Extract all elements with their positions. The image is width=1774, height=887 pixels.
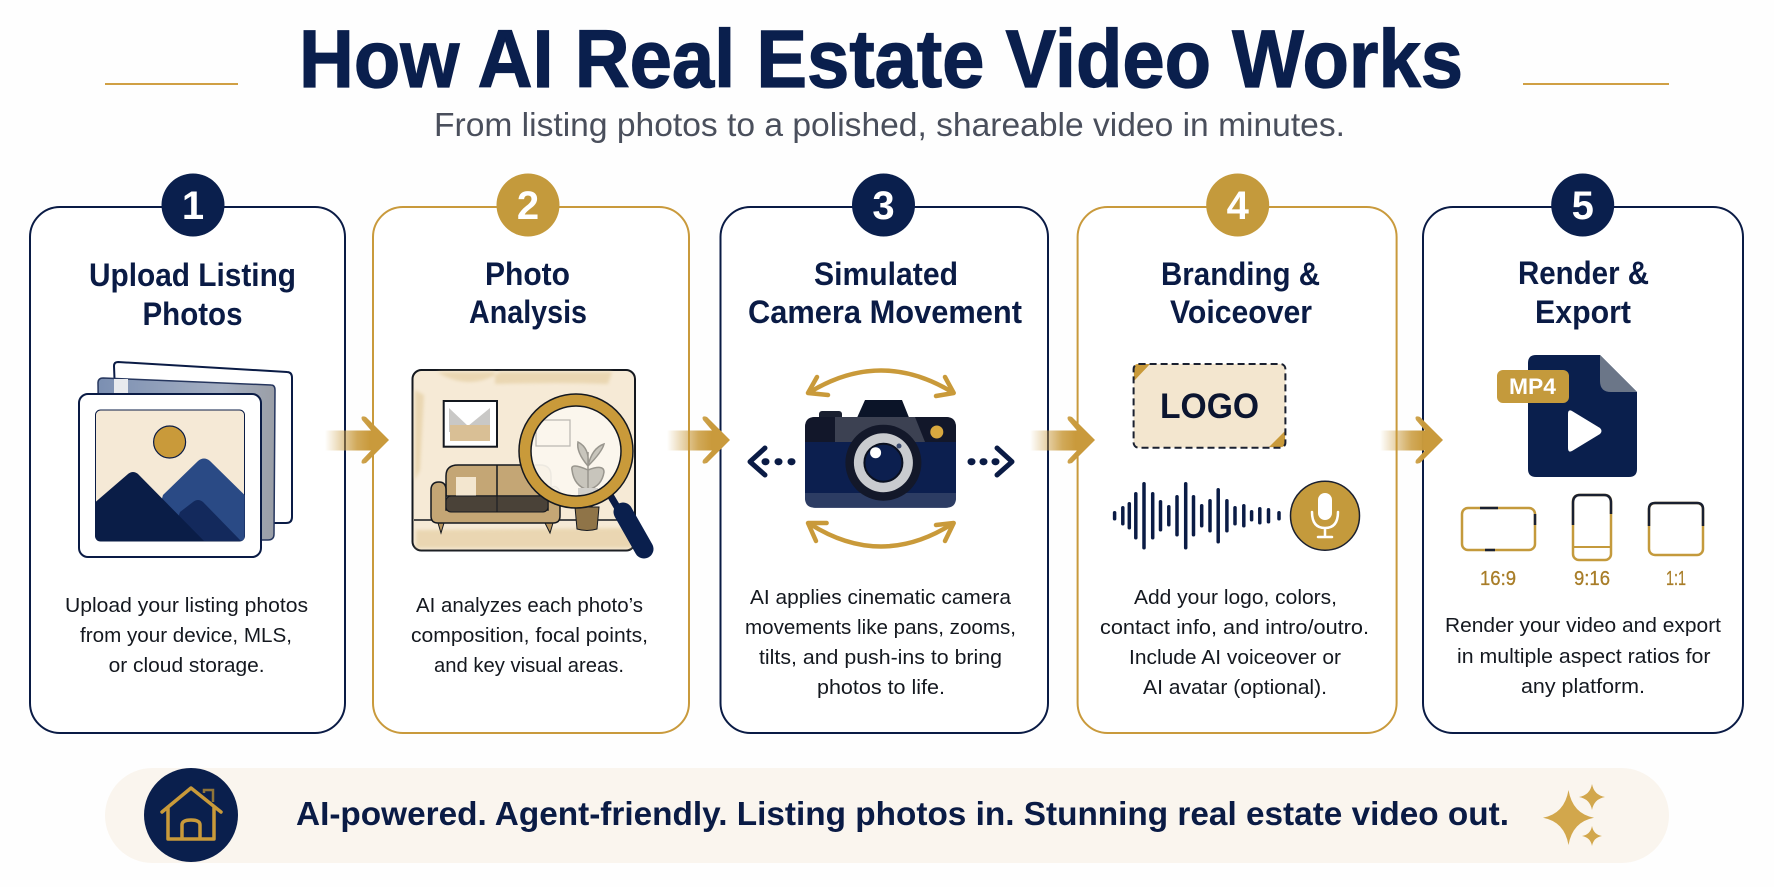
arrow: step 4 to 5 <box>1380 416 1443 464</box>
description <box>1445 614 1721 698</box>
heading: Branding & <box>1161 256 1320 292</box>
heading: Photos <box>142 296 242 332</box>
description <box>1100 586 1369 699</box>
description: AI avatar (optional). <box>1143 676 1327 699</box>
arrow: step 2 to 3 <box>667 416 730 464</box>
heading: Analysis <box>469 294 587 330</box>
card frame <box>373 207 689 733</box>
icon: room photo with magnifier <box>412 370 644 550</box>
tagline: AI-powered. Agent-friendly. Listing photos in. Stunning real estate video out. <box>296 795 1509 832</box>
description: or cloud storage. <box>109 654 265 677</box>
icon: mp4 file <box>1497 355 1637 477</box>
description: movements like pans, zooms, <box>745 616 1016 639</box>
title: How AI Real Estate Video Works <box>299 14 1463 105</box>
heading: Photo <box>485 256 570 292</box>
subtitle: From listing photos to a polished, shareable video in minutes. <box>434 106 1345 143</box>
icon: 16:9 ratio <box>1462 508 1535 590</box>
icon: logo placeholder: LOGO <box>1160 387 1259 426</box>
banner <box>105 768 1669 863</box>
step badge 4 <box>1206 174 1269 236</box>
step badge 2: 2 <box>517 184 539 228</box>
card frame <box>1423 207 1743 733</box>
step badge 5 <box>1551 174 1614 236</box>
heading <box>748 256 1022 330</box>
heading <box>1518 255 1649 330</box>
description: Include AI voiceover or <box>1129 646 1341 669</box>
icon: house <box>144 768 238 862</box>
heading: Camera Movement <box>748 294 1022 330</box>
step badge 1 <box>162 174 224 236</box>
icon: logo placeholder <box>1134 364 1285 448</box>
description: any platform. <box>1521 675 1645 698</box>
step badge 3: 3 <box>872 184 895 228</box>
icon: microphone <box>1290 481 1360 550</box>
icon: mp4 file: MP4 <box>1509 374 1557 399</box>
icon: camera <box>805 400 956 508</box>
icon: 16:9 ratio: 16:9 <box>1480 568 1516 590</box>
description: composition, focal points, <box>411 624 648 647</box>
panel: step 4 branding <box>1078 174 1397 733</box>
heading <box>1161 256 1320 330</box>
heading: Render & <box>1518 255 1649 291</box>
panel: step 1 upload <box>30 174 345 733</box>
description: Upload your listing photos <box>65 594 308 617</box>
description: AI applies cinematic camera <box>750 586 1012 609</box>
step badge 4: 4 <box>1227 184 1250 228</box>
heading: Upload Listing <box>89 257 296 293</box>
icon: sparkles <box>1543 784 1605 846</box>
description: AI analyzes each photo’s <box>416 594 643 617</box>
description: from your device, MLS, <box>80 624 292 647</box>
description <box>411 594 648 677</box>
step badge 3 <box>852 174 915 236</box>
step badge 5: 5 <box>1572 184 1594 228</box>
icon: 9:16 ratio: 9:16 <box>1574 568 1610 590</box>
icon: photo stack <box>79 362 292 557</box>
description: contact info, and intro/outro. <box>1100 616 1369 639</box>
banner background <box>105 768 1669 863</box>
icon: pan arrows <box>750 448 1012 475</box>
icon: 1:1 ratio <box>1649 503 1703 590</box>
icon: 9:16 ratio <box>1573 495 1611 590</box>
description: Add your logo, colors, <box>1134 586 1337 609</box>
heading: Export <box>1535 294 1631 330</box>
panel: step 2 analysis <box>373 174 689 733</box>
card frame <box>30 207 345 733</box>
icon: 1:1 ratio: 1:1 <box>1666 568 1686 590</box>
description: tilts, and push-ins to bring <box>759 646 1002 669</box>
step badge 2 <box>496 174 560 236</box>
description <box>65 594 308 677</box>
description: in multiple aspect ratios for <box>1457 645 1711 668</box>
heading <box>469 256 587 330</box>
heading: Simulated <box>814 256 958 292</box>
description <box>745 586 1016 699</box>
heading: Voiceover <box>1170 294 1312 330</box>
arrow: step 3 to 4 <box>1030 416 1095 464</box>
icon: voice waveform <box>1115 484 1279 548</box>
card frame <box>720 207 1048 733</box>
icon: camera movement arrows <box>808 370 954 546</box>
panel: step 3 camera movement <box>720 174 1048 733</box>
heading <box>89 257 296 332</box>
description: and key visual areas. <box>434 654 624 677</box>
panel: step 5 export <box>1423 174 1743 733</box>
step badge 1: 1 <box>182 184 204 228</box>
description: Render your video and export <box>1445 614 1721 637</box>
description: photos to life. <box>817 676 945 699</box>
card frame <box>1078 207 1397 733</box>
arrow: step 1 to 2 <box>325 416 389 464</box>
